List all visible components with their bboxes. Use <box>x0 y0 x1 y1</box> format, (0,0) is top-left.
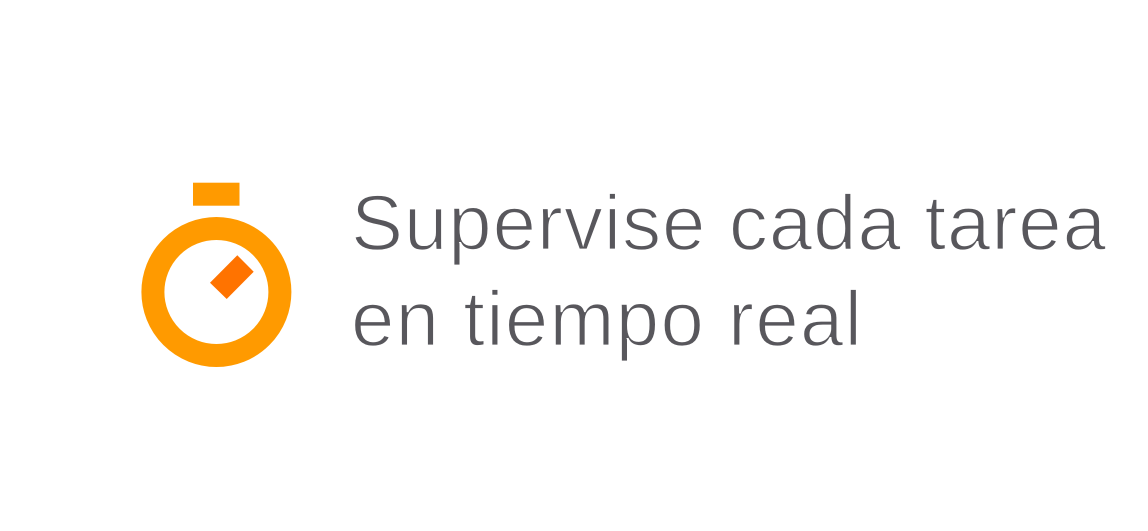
stopwatch ring <box>153 228 280 356</box>
heading text <box>351 178 1107 362</box>
stopwatch top button <box>193 183 240 206</box>
stopwatch hand <box>210 255 254 299</box>
heading line 1: Supervise cada tarea <box>351 178 1107 266</box>
icon: stopwatch <box>153 183 280 356</box>
heading line 2: en tiempo real <box>351 274 862 362</box>
